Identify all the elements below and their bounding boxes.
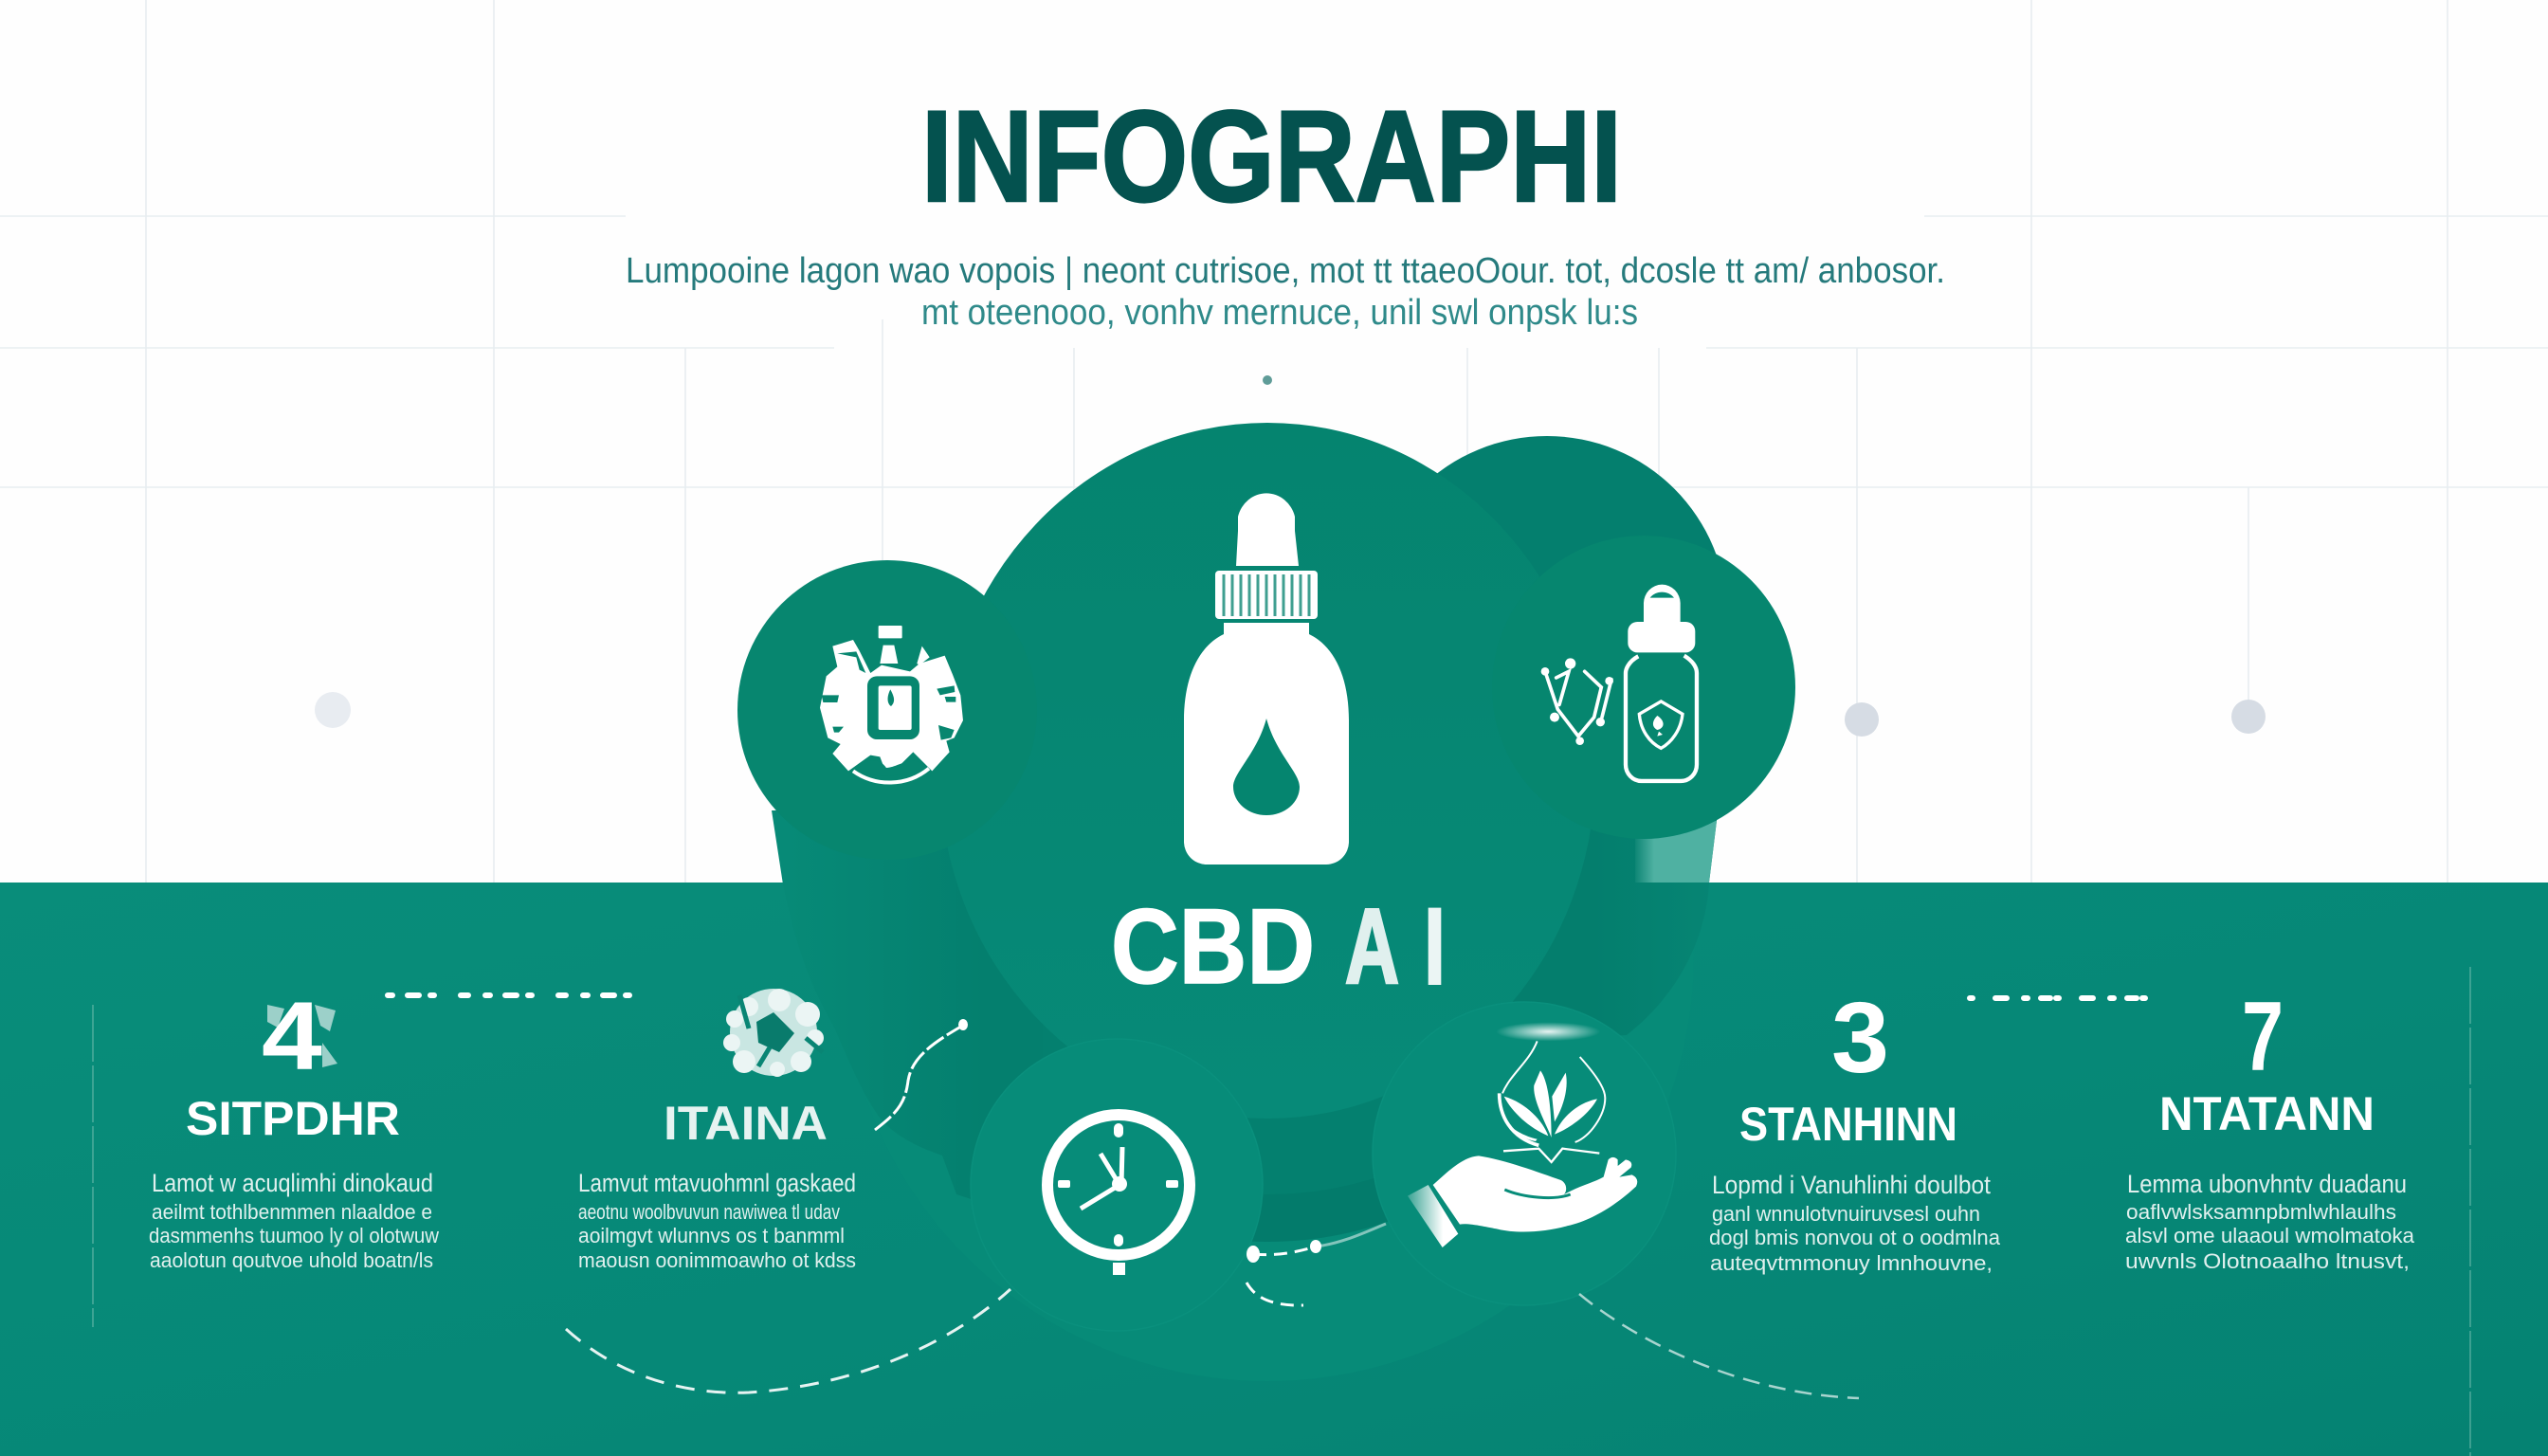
icon: gear with bottle: [820, 626, 963, 783]
column 2 body: aeotnu woolbvuvun nawiwea tl udav: [578, 1200, 840, 1224]
icon: dropper bottle: [1184, 493, 1349, 864]
hub label: I: [1425, 887, 1445, 1006]
left badge: [737, 560, 1037, 860]
column 4 body: alsvl ome ulaaoul wmolmatoka: [2125, 1224, 2415, 1247]
column 3 body: ganl wnnulotvnuiruvsesl ouhn: [1712, 1202, 1980, 1226]
column 2 body: [578, 1169, 856, 1272]
column 4 body: Lemma ubonvhntv duadanu: [2127, 1170, 2407, 1198]
column 4 number: 7: [2242, 982, 2284, 1092]
small dot above hub: [1263, 375, 1272, 385]
column 2 heading: ITAINA: [664, 1097, 828, 1150]
connector: curved line to dot: [875, 1019, 968, 1130]
hub label: [1111, 887, 1445, 1006]
connector: lower left dashed arc: [566, 1289, 1010, 1392]
column 3 body: [1709, 1171, 2001, 1275]
column 1: [149, 982, 439, 1272]
dotted rule right: [1970, 995, 2158, 1001]
number 4 texture: [267, 1005, 337, 1067]
column 3 number: 3: [1831, 982, 1889, 1094]
column 1 body: Lamot w acuqlimhi dinokaud: [152, 1169, 433, 1197]
column 4 body: uwvnls Olotnoaalho ltnusvt,: [2125, 1249, 2410, 1273]
subtitle: mt oteenooo, vonhv mernuce, unil swl onpsk lu:s: [921, 293, 1638, 333]
subtitle: [626, 251, 1945, 333]
column 1 body: [149, 1169, 439, 1272]
column 4 body: oaflvwlsksamnpbmlwhlaulhs: [2126, 1200, 2396, 1224]
icon: column 2 gear: [723, 989, 824, 1077]
column 2: [578, 1097, 856, 1272]
faint vertical edge lines: [93, 967, 2470, 1456]
column 3: [1709, 982, 2001, 1275]
connector: dots between badges: [1247, 1224, 1386, 1305]
connector: lower right dashed arc: [1579, 1294, 1859, 1398]
hand badge: [1373, 1002, 1676, 1305]
column 1 body: dasmmenhs tuumoo ly ol olotwuw: [149, 1224, 439, 1247]
column 2 body: Lamvut mtavuohmnl gaskaed: [578, 1169, 856, 1197]
column 2 body: maousn oonimmoawho ot kdss: [578, 1248, 856, 1272]
column 1 body: aeilmt tothlbenmmen nlaaldoe e: [152, 1200, 432, 1224]
icon: molecule: [1541, 658, 1613, 745]
green lower band: [0, 883, 2548, 1456]
background dot right two: [2231, 700, 2266, 734]
subtitle: Lumpooine lagon wao vopois | neont cutrisoe, mot tt ttaeoOour. tot, dcosle tt am/ anbosor.: [626, 251, 1945, 291]
clock badge: [971, 1039, 1263, 1331]
column 4 heading: NTATANN: [2159, 1087, 2375, 1140]
title: INFOGRAPHI: [921, 84, 1622, 229]
background dot right one: [1845, 702, 1879, 737]
icon: hand holding plant: [1408, 1022, 1637, 1247]
column 3 body: auteqvtmmonuy lmnhouvne,: [1710, 1251, 1993, 1275]
column 3 body: dogl bmis nonvou ot o oodmlna: [1709, 1226, 2001, 1249]
hub label: A: [1345, 887, 1399, 1006]
column 2 body: aoilmgvt wlunnvs os t banmml: [578, 1224, 845, 1247]
icon: clock: [1047, 1115, 1190, 1275]
column 1 body: aaolotun qoutvoe uhold boatn/ls: [150, 1248, 433, 1272]
column 3 body: Lopmd i Vanuhlinhi doulbot: [1712, 1171, 1991, 1199]
column 4: [2125, 982, 2415, 1273]
main hub circle: [939, 423, 1595, 1119]
dotted rule left: [388, 992, 633, 998]
hub label: CBD: [1111, 887, 1315, 1006]
column 3 heading: STANHINN: [1739, 1098, 1957, 1151]
rear hub circles: [772, 436, 1717, 1242]
icon: small bottle with shield: [1626, 585, 1697, 781]
column 4 body: [2125, 1170, 2415, 1273]
background dot left: [315, 692, 351, 728]
column 1 heading: SITPDHR: [186, 1092, 400, 1145]
column 1 number: 4: [262, 982, 322, 1090]
right badge: [1492, 536, 1795, 839]
